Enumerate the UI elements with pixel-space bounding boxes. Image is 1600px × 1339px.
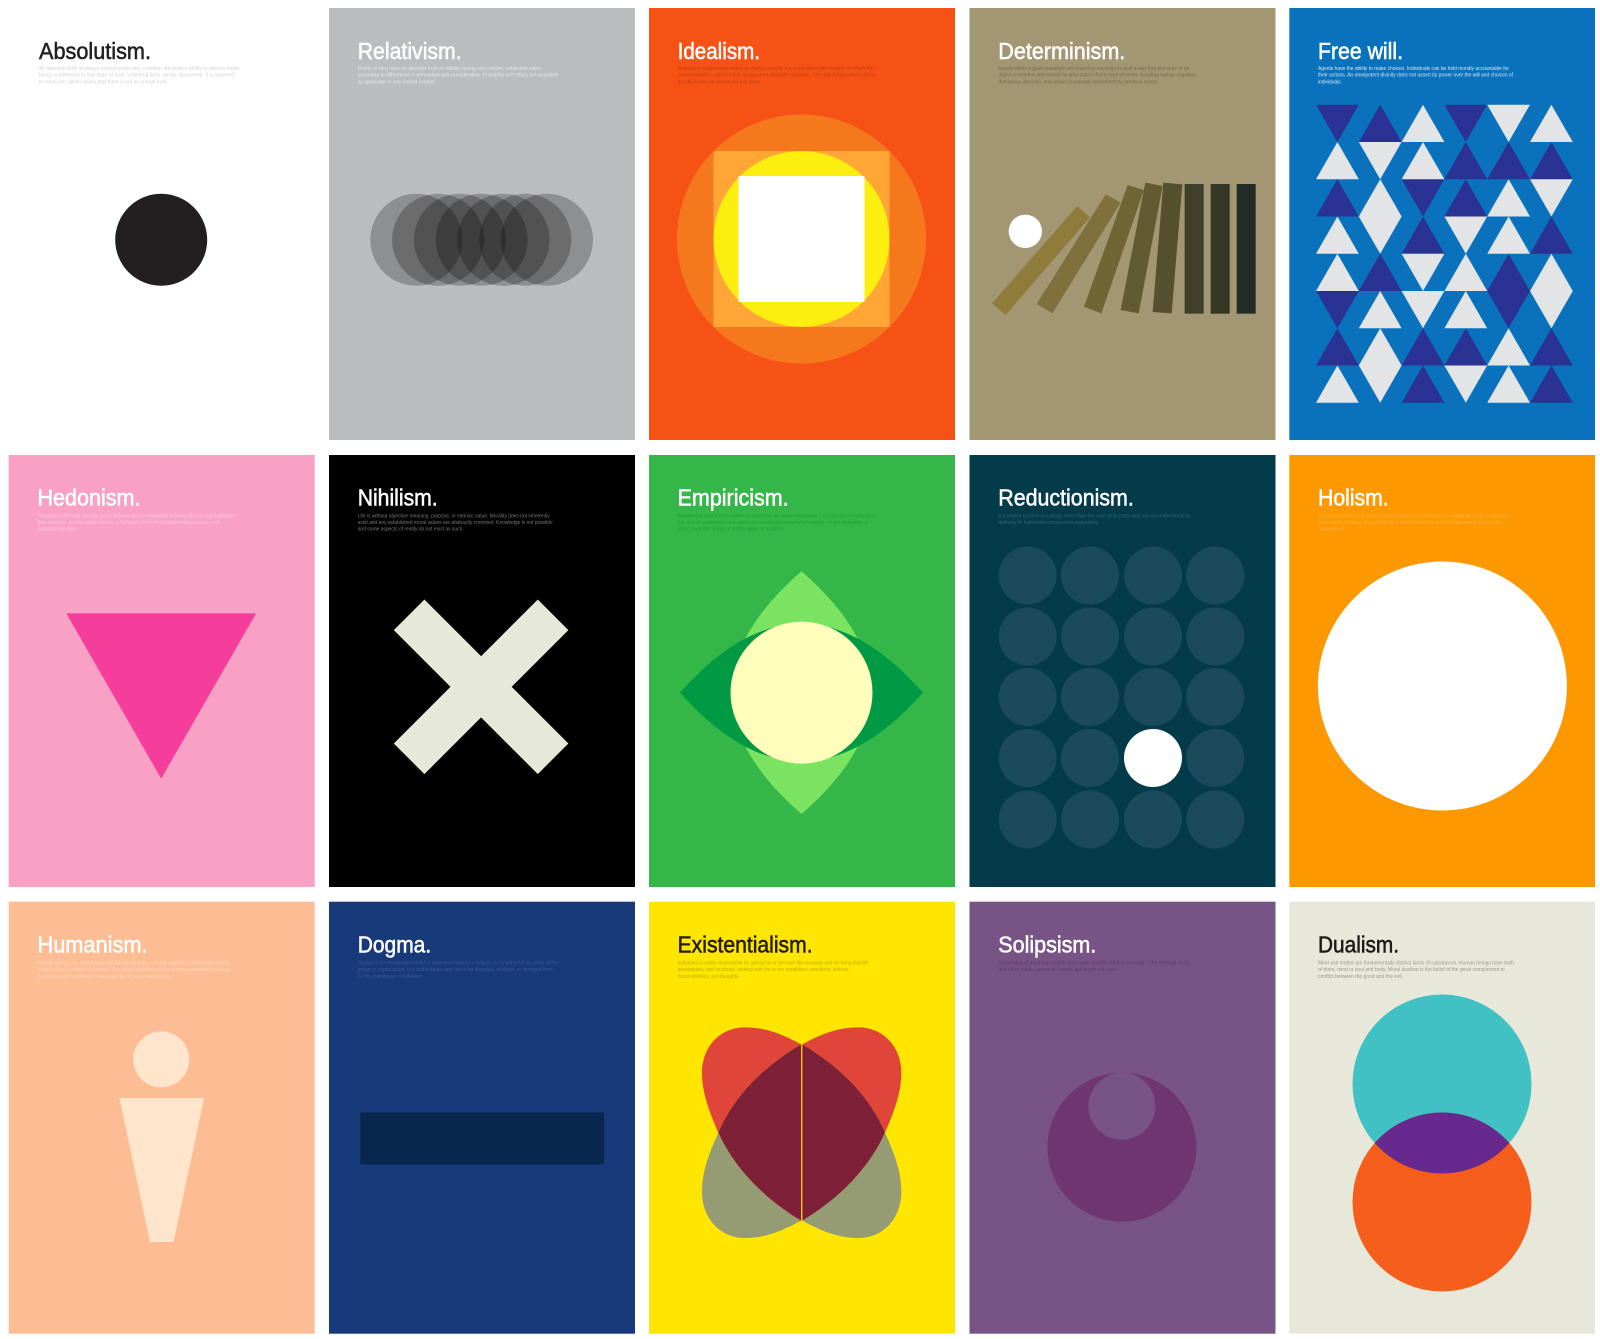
icon: triangle pattern [1316,105,1573,403]
heading: Empiricism: Empiricism. [678,485,789,511]
text: Idealism description: Reference is ultimately based on mental activity. It is contrasted with realism, in which the [678,66,874,72]
heading: Humanism: Humanism. [38,932,148,958]
icon: cross [409,615,553,759]
text: Dualism description [1318,960,1514,980]
panel: Hedonism [9,455,315,887]
panel: Idealism [649,8,955,440]
text: Solipsism description: and other minds cannot be known and might not exist. [998,967,1117,973]
heading: Reductionism: Reductionism. [998,485,1134,511]
text: Existentialism description: responsibilities, and thoughts. [678,974,740,980]
text: Absolutism description: things is irrelevant to that state of truth. Universal facts can be discovered. It is opposed [39,73,234,79]
heading: Dogma: Dogma. [358,932,431,958]
icon: falling dominoes and ball [992,183,1256,315]
text: Holism description: parts behave. [1318,527,1347,533]
text: Nihilism description: and some aspects of reality do not exist as such. [358,527,464,533]
text: Solipsism description: Knowledge of anything outside one's own specific mind is uncertain. The external world [998,960,1190,966]
text: Determinism description: object or event is determined by prior states. Every type of event, including human cognition, [998,73,1197,79]
text: Dogma description: Dogma is the established belief or statement held by a religion, or by adherent by some of the [358,960,558,966]
text: Absolutism description: An absolute truth is always correct under any condition. An entity's ability to discern those [39,66,239,72]
text: Solipsism description [998,960,1190,973]
text: Relativism description: as applicable in only limited context. [358,79,436,85]
heading: Dualism: Dualism. [1318,932,1399,958]
text: Reductionism description: defining its individual components separately. [998,520,1099,526]
panel: Nihilism [329,455,635,887]
text: Hedonism description: minimize the pain. [38,527,78,533]
text: Holism description [1318,513,1511,533]
text: Idealism description: directly known for certain are just ideas. [678,79,762,85]
text: Dogma description [358,960,558,980]
heading: Hedonism: Hedonism. [38,485,140,511]
panel: Solipsism [970,902,1276,1334]
text: Free will description: Agents have the ability to make choices. Individuals can be held morally accountable for [1318,66,1509,72]
heading: Free will: Free will. [1318,38,1403,64]
text: Determinism description [998,66,1197,85]
text: Nihilism description: Life is without objective meaning, purpose, or intrinsic value. Morality does not inherently [358,513,550,519]
text: Empiricism description: ideas, over the notion of innate ideas or tradition. [678,527,785,533]
text: Absolutism description [39,66,239,85]
icon: human figure [119,1031,204,1242]
heading: Nihilism: Nihilism. [358,485,438,511]
heading: Determinism: Determinism. [998,38,1125,64]
text: Absolutism description: to relativism, which claims that there is not an unique truth. [39,79,168,85]
panel: Existentialism [649,902,955,1334]
heading: Idealism: Idealism. [678,38,760,64]
panel: Relativism [329,8,635,440]
text: Humanism description: humanity and the ethical consequences of human decisions. [38,974,170,980]
text: Nihilism description [358,513,553,533]
icon: overlapping grey circles [370,194,593,286]
text: Free will description [1318,66,1514,85]
text: Reductionism description [998,513,1191,526]
text: Existentialism description [678,960,869,980]
text: Dogma description: by the practitioner or believers. [358,974,424,980]
panel: Free will [1289,8,1595,440]
icon: circle within circle [1047,1073,1196,1222]
text: Humanism description: Human beings can lead happy and functional lives, and are capable of being ethical and [38,960,230,966]
icon: eye [680,571,923,814]
icon: pink inverted triangle [66,613,256,779]
panel: Dogma [329,902,635,1334]
text: Empiricism description [678,513,876,533]
icon: white circle [1318,562,1567,810]
text: Humanism description: moral without a religion or dogma. The stance emphasizes the unique responsibility facing [38,967,230,973]
icon: dark bar [360,1112,604,1164]
text: Determinism description: Events within a given paradigm are bound by causality in such a way that any state of an [998,66,1190,72]
text: Relativism description [358,66,558,85]
text: Holism description: parts alone. Instead, the system as a whole determines in an important way how the [1318,520,1501,526]
heading: Absolutism: Absolutism. [39,38,151,64]
text: Dualism description: Mind and matter are fundamentally distinct kinds of substances. Human beings have both [1318,960,1514,966]
panel: Humanism [9,902,315,1334]
text: Hedonism description: Pleasure is the only intrinsic good. Actions can be evaluated in terms of how much pleasure [38,513,237,519]
panel: Dualism [1289,902,1595,1334]
text: Dualism description: of them, mind or soul and body. Moral dualism is the belief of the great complement or [1318,967,1505,973]
icon: grid of circles [999,546,1244,848]
panel: Reductionism [970,455,1276,887]
heading: Holism: Holism. [1318,485,1389,511]
panel: Absolutism [9,8,315,440]
text: Existentialism description: Individual is solely responsible for giving his or her own life meaning and for living that life [678,960,869,966]
panel: Determinism [970,8,1276,440]
text: Free will description: their actions. An omnipotent divinity does not assert its power over the will and choices of [1318,73,1514,79]
text: Relativism description: Points of view have no absolute truth or validity having only relative, subjective value [358,66,541,72]
icon: four-petal shape [702,1027,901,1238]
text: Determinism description: (behaviour, decision, and action) is causally determined by previous events. [998,79,1159,85]
icon: black circle [115,194,207,286]
text: Nihilism description: exist and any established moral values are abstractly contrived. Knowledge is not possible [358,520,553,526]
text: Relativism description: according to differences in perception and consideration. Principles and ethics are regarded [358,73,558,79]
text: Dogma description: group or organization. It is authoritative and not to be disputed, doubted, or diverged from [358,967,553,973]
text: Reductionism description: A complex system is nothing more than the sum of its parts and can be understood by [998,513,1191,519]
text: Holism description: All the properties of a given system cannot be determined or explained by its component [1318,513,1511,519]
panel: Holism [1289,455,1595,887]
text: Empiricism description: Knowledge arises from evidence gathered via sense experience. Empiricism emphasizes [678,513,876,519]
panel: Empiricism [649,455,955,887]
text: Hedonism description: they produce. In very simple terms, a hedonist strives to maximize the pleasure and [38,520,220,526]
text: Existentialism description: passionately and sincerely, dealing with his or her conditions, emotions, actions, [678,967,850,973]
heading: Existentialism: Existentialism. [678,932,813,958]
text: Free will description: individuals. [1318,79,1342,85]
text: Humanism description [38,960,230,980]
heading: Relativism: Relativism. [358,38,462,64]
text: Empiricism description: the role of experience and evidence, especially sensory perception, in the formation of [678,520,869,526]
icon: two overlapping circles [1352,994,1532,1292]
icon: nested circle and squares [677,114,926,364]
text: Dualism description: conflict between the good and the evil. [1318,974,1403,980]
text: Hedonism description [38,513,237,533]
text: Idealism description [678,66,876,85]
text: Idealism description: external world is said to have an apparent absolute existence. The only things which can be [678,73,876,79]
heading: Solipsism: Solipsism. [998,932,1096,958]
